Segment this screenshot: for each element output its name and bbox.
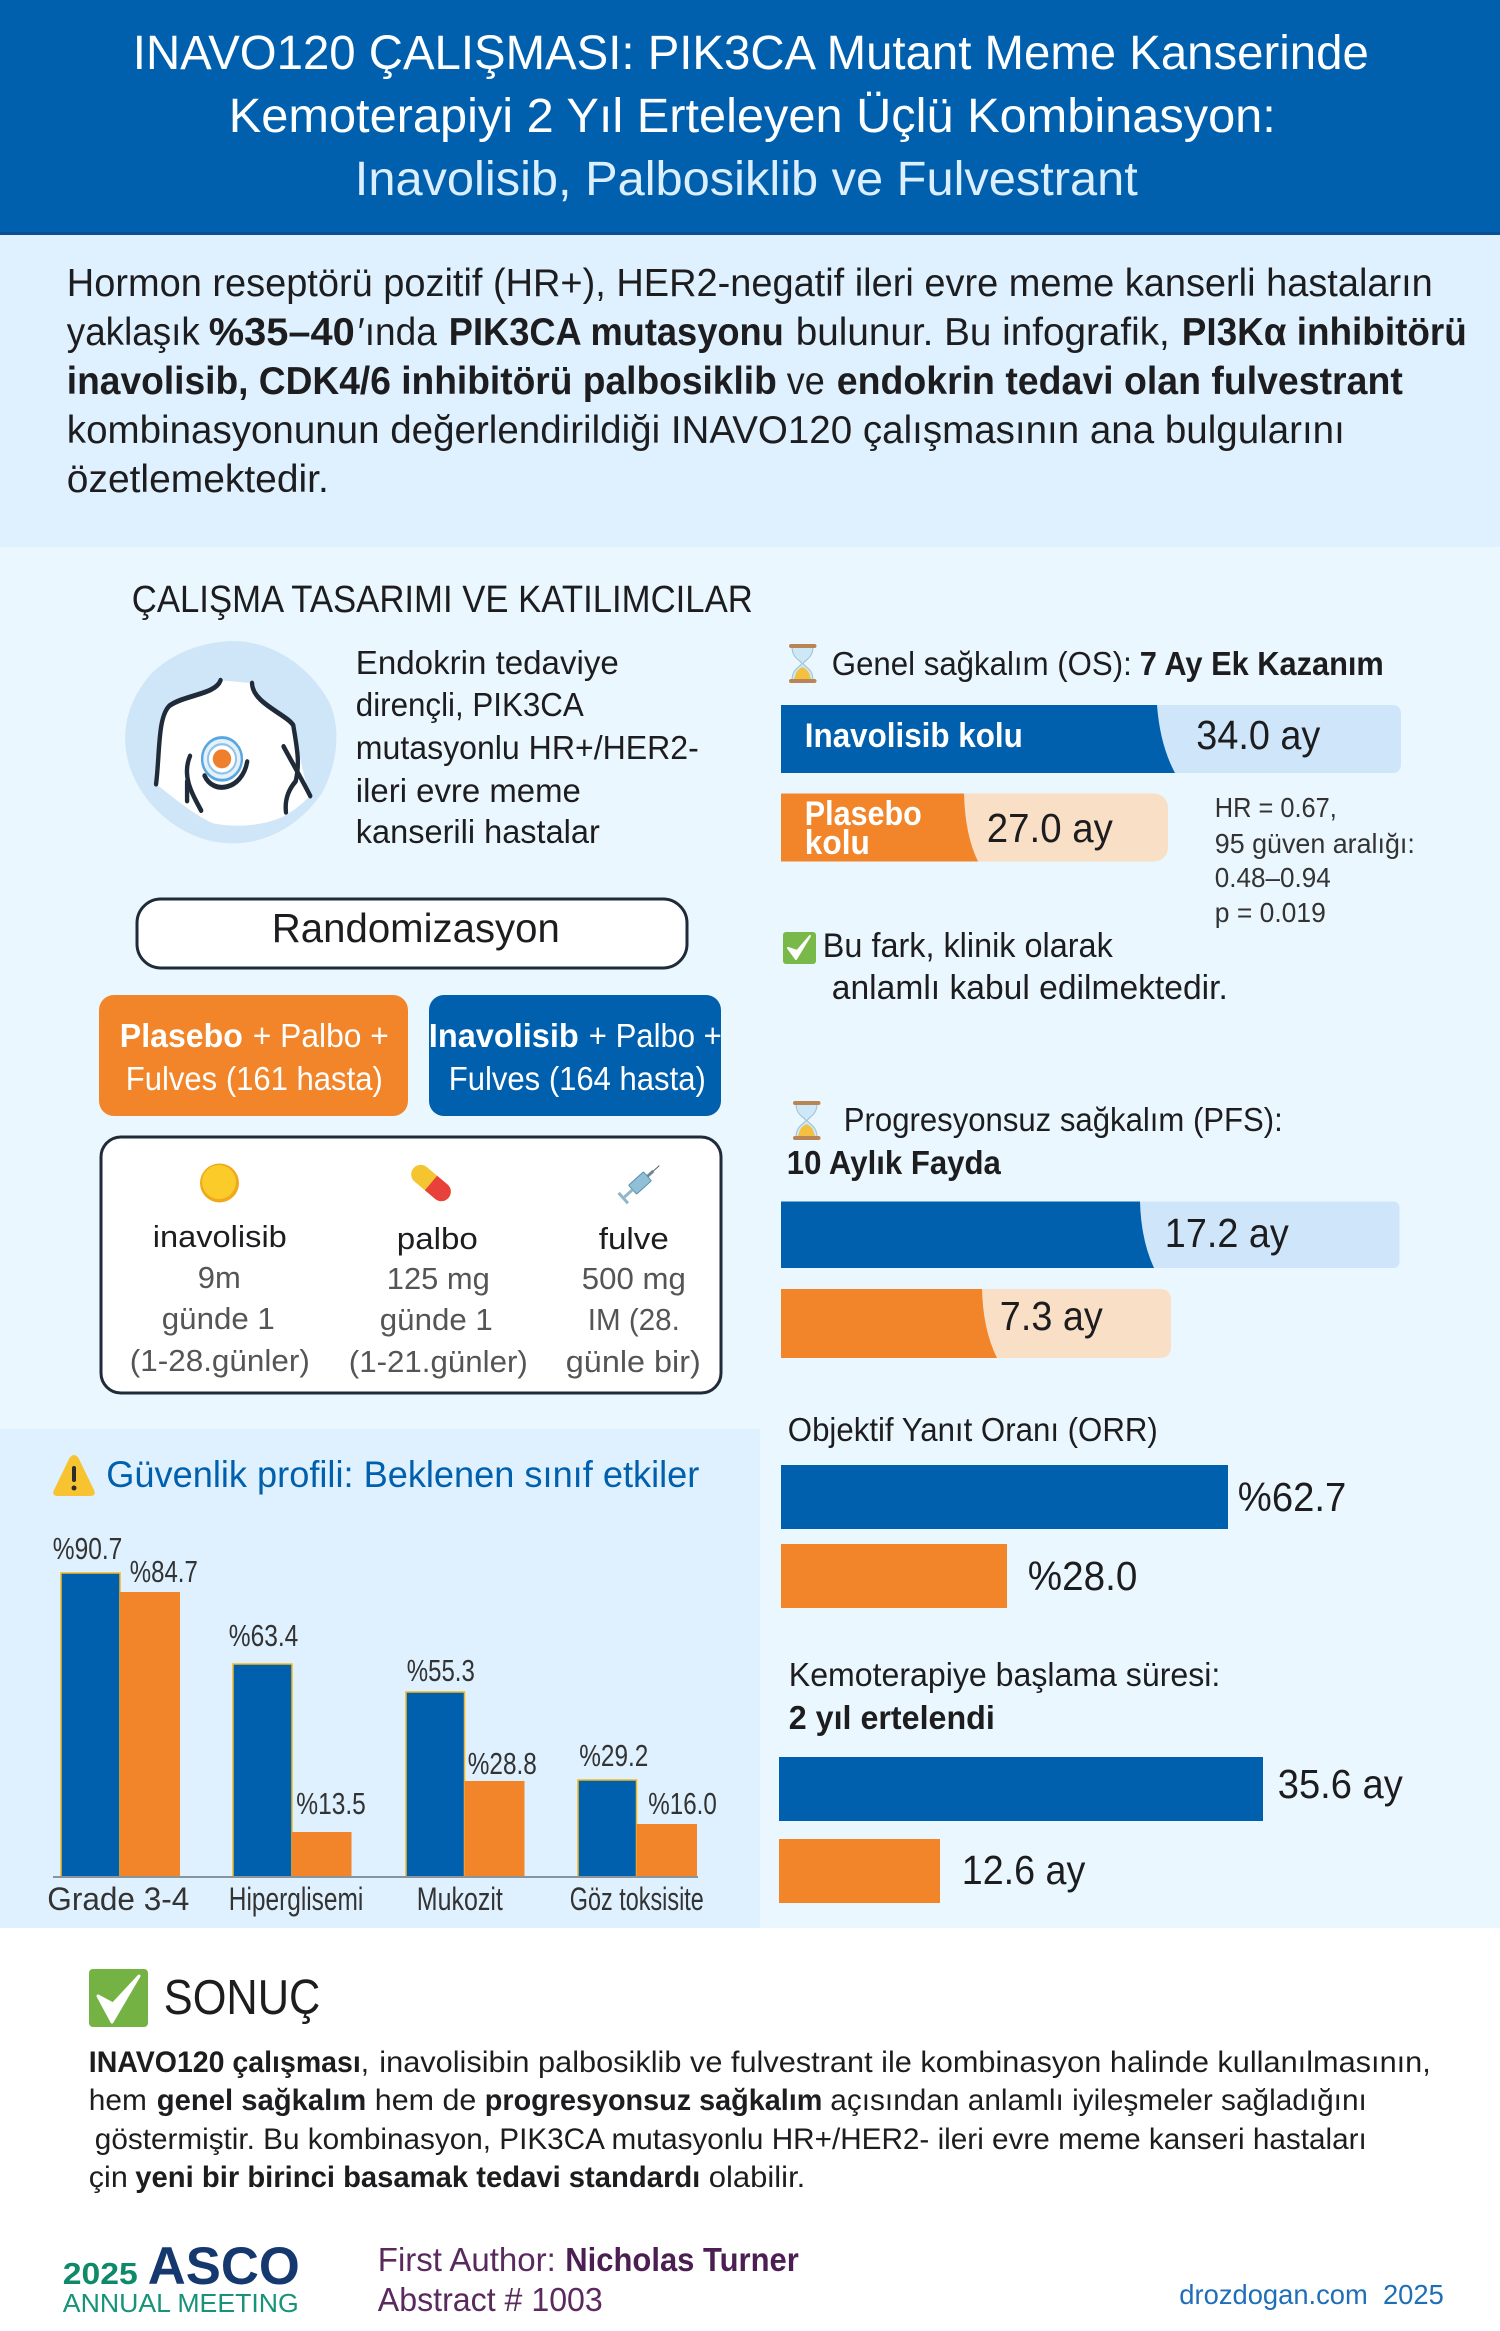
heading: study design: ÇALIŞMA TASARIMI VE KATILIMCILAR [132, 579, 753, 621]
heading: safety profile: Güvenlik profili: Beklenen sınıf etkiler [106, 1454, 699, 1495]
heading: ORR: Objektif Yanıt Oranı (ORR) [788, 1411, 1158, 1448]
bar: inavolisib PFS [781, 1202, 1400, 1268]
panel: study design [99, 579, 753, 1393]
heading: PFS [787, 1101, 1283, 1181]
title: Inavolisib, Palbosiklib ve Fulvestrant [355, 153, 1138, 206]
bar: inavolisib OS: Inavolisib kolu [805, 717, 1023, 755]
panel: introduction: endokrin tedavi olan fulvestrant [837, 360, 1403, 403]
heading: time to chemotherapy: Kemoterapiye başlama süresi: [789, 1656, 1220, 1693]
panel: introduction: Hormon reseptörü pozitif (HR+), HER2-negatif ileri evre meme kanserli hastaların [67, 262, 1433, 305]
bar: placebo ORR [781, 1544, 1137, 1608]
value labels: %29.2 [579, 1738, 648, 1773]
bars: ocular toxicity [578, 1780, 697, 1877]
bar: placebo PFS [781, 1289, 1171, 1358]
bar: placebo chemo [779, 1839, 1086, 1903]
box: inavolisib arm: + Palbo + [589, 1017, 722, 1054]
panel: introduction: %35–40 [209, 311, 355, 354]
text: inavolisib dose: günde 1 [162, 1301, 275, 1336]
value labels: %28.8 [468, 1746, 537, 1781]
icon: check mark [89, 1969, 148, 2027]
box: placebo arm: + Palbo + [253, 1017, 389, 1054]
logo: ASCO 2025 annual meeting [63, 2237, 300, 2318]
callout: clinical significance [823, 927, 1228, 1007]
text: conclusion body: açısından anlamlı iyileşmeler sağladığını [830, 2084, 1367, 2117]
panel: progression-free survival [781, 1101, 1400, 1358]
box: inavolisib arm: Inavolisib [429, 1017, 579, 1054]
panel: introduction: kombinasyonunun değerlendirildiği INAVO120 çalışmasının ana bulgularını [67, 409, 1345, 452]
bar: inavolisib OS [781, 705, 1401, 773]
text: author and abstract: Abstract # 1003 [378, 2281, 603, 2318]
panel: conclusion [89, 1969, 1431, 2194]
header banner [0, 0, 1500, 235]
value labels: %63.4 [229, 1618, 298, 1653]
panel: safety profile [0, 1429, 760, 1928]
heading: PFS: 10 Aylık Fayda [787, 1144, 1001, 1181]
panel: introduction: inavolisib, CDK4/6 inhibitörü palbosiklib [67, 360, 777, 403]
bar: placebo OS: 27.0 ay [987, 805, 1113, 851]
text: conclusion body: genel sağkalım [157, 2084, 366, 2117]
text: fulve dose [566, 1221, 701, 1379]
text: patient population: kanserili hastalar [356, 813, 600, 850]
icon: check mark [783, 932, 816, 964]
text: inavolisib dose: 9m [198, 1260, 241, 1295]
text: patient population: Endokrin tedaviye [356, 644, 619, 681]
callout: clinical significance: anlamlı kabul edilmektedir. [832, 969, 1228, 1007]
panel: dosing [101, 1137, 721, 1393]
text: palbo dose: günde 1 [380, 1302, 493, 1337]
heading: PFS: Progresyonsuz sağkalım (PFS): [844, 1101, 1283, 1138]
box: placebo arm: Plasebo [120, 1017, 243, 1054]
text: patient population [356, 644, 699, 850]
logo: ASCO 2025 annual meeting: 2025 [63, 2256, 138, 2291]
panel: overall survival [781, 644, 1415, 1007]
panel: introduction: yaklaşık [67, 311, 200, 354]
icon: syringe [617, 1160, 664, 1204]
icon: warning triangle [53, 1455, 95, 1496]
value labels: %55.3 [407, 1653, 475, 1688]
panel: introduction: PIK3CA mutasyonu [449, 311, 784, 354]
bar: placebo ORR: %28.0 [1028, 1553, 1137, 1599]
bar: inavolisib chemo [779, 1757, 1403, 1821]
heading: OS: 7 Ay Ek Kazanım [1140, 645, 1384, 682]
text: patient population: dirençli, PIK3CA [356, 686, 584, 723]
text: conclusion body: inavolisibin palbosiklib ve fulvestrant ile kombinasyon halinde kullanılmasının, [379, 2046, 1431, 2079]
text: fulve dose: IM (28. [588, 1302, 680, 1337]
bars: hyperglycemia [233, 1664, 352, 1877]
panel: introduction: PI3Kα inhibitörü [1182, 311, 1467, 354]
heading: time to chemotherapy [789, 1656, 1220, 1736]
category labels: Hiperglisemi [229, 1881, 363, 1917]
icon: hourglass [789, 644, 816, 683]
text: patient population: mutasyonlu HR+/HER2- [356, 729, 699, 766]
text: hazard ratio: 0.48–0.94 [1215, 862, 1331, 893]
heading: OS: Genel sağkalım (OS): [832, 645, 1132, 682]
panel: time to chemotherapy [779, 1656, 1403, 1903]
value labels [53, 1531, 717, 1821]
text: conclusion body: INAVO120 çalışması [89, 2046, 361, 2079]
panel: objective response rate [781, 1411, 1346, 1608]
category labels [47, 1881, 704, 1917]
heading: conclusion: SONUÇ [164, 1971, 320, 2025]
text: website credit: drozdogan.com 2025 [1179, 2279, 1444, 2310]
logo: ASCO 2025 annual meeting: ANNUAL MEETING [63, 2288, 299, 2318]
value labels: %16.0 [648, 1786, 717, 1821]
text: conclusion body [89, 2046, 1431, 2194]
bars: mucositis [406, 1692, 524, 1877]
box: inavolisib arm [429, 995, 722, 1116]
text: hazard ratio: 95 güven aralığı: [1215, 828, 1415, 859]
value labels: %84.7 [130, 1554, 198, 1589]
text: conclusion body: olabilir. [709, 2161, 805, 2194]
box: inavolisib arm: Fulves (164 hasta) [449, 1060, 706, 1097]
text: fulve dose: fulve [599, 1221, 669, 1256]
text: palbo dose: (1-21.günler) [349, 1344, 528, 1379]
box: randomization: Randomizasyon [272, 905, 560, 951]
bar: placebo OS: kolu [805, 824, 870, 862]
text: conclusion body: göstermiştir. Bu kombinasyon, PIK3CA mutasyonlu HR+/HER2- ileri evre meme kanseri hastaları [95, 2123, 1367, 2156]
bar: inavolisib PFS: 17.2 ay [1165, 1210, 1289, 1256]
text: palbo dose: palbo [397, 1221, 478, 1256]
box: placebo arm [99, 995, 408, 1116]
text: conclusion body: yeni bir birinci basamak tedavi standardı [135, 2161, 700, 2194]
text: conclusion body: hem [89, 2084, 147, 2117]
panel: introduction: özetlemektedir. [67, 458, 329, 501]
text: hazard ratio: HR = 0.67, [1215, 792, 1337, 823]
text: inavolisib dose [130, 1219, 310, 1378]
box: randomization [137, 899, 687, 968]
heading: OS [832, 645, 1384, 682]
icon: capsule [407, 1161, 455, 1205]
icon: hourglass [793, 1101, 820, 1140]
value labels: %13.5 [296, 1786, 366, 1821]
text: author and abstract: First Author: [378, 2241, 556, 2278]
text: conclusion body: , [361, 2046, 369, 2079]
bar chart: adverse events [47, 1531, 717, 1917]
text: hazard ratio [1215, 792, 1415, 928]
bars: grade 3-4 [61, 1573, 180, 1877]
text: conclusion body: hem de [375, 2084, 476, 2117]
bar: placebo chemo: 12.6 ay [962, 1847, 1086, 1893]
text: fulve dose: 500 mg [582, 1261, 686, 1296]
text: palbo dose: 125 mg [387, 1261, 490, 1296]
text: author and abstract [378, 2241, 799, 2318]
category labels: Grade 3-4 [47, 1881, 189, 1917]
logo: ASCO 2025 annual meeting: ASCO [148, 2237, 300, 2296]
category labels: Mukozit [417, 1881, 503, 1917]
bar: inavolisib chemo: 35.6 ay [1278, 1761, 1403, 1807]
value labels: %90.7 [53, 1531, 122, 1566]
text: conclusion body: progresyonsuz sağkalım [485, 2084, 822, 2117]
panel: introduction: ve [787, 360, 825, 403]
bar: inavolisib ORR: %62.7 [1238, 1474, 1346, 1520]
title: INAVO120 ÇALIŞMASI: PIK3CA Mutant Meme Kanserinde [133, 27, 1369, 80]
text: conclusion body: çin [89, 2161, 128, 2194]
panel: introduction: bulunur. Bu infografik, [796, 311, 1170, 354]
title: Kemoterapiyi 2 Yıl Erteleyen Üçlü Kombinasyon: [229, 90, 1276, 143]
heading: time to chemotherapy: 2 yıl ertelendi [789, 1699, 995, 1736]
text: palbo dose [349, 1221, 528, 1379]
text: hazard ratio: p = 0.019 [1215, 897, 1326, 928]
text: fulve dose: günle bir) [566, 1344, 701, 1379]
callout: clinical significance: Bu fark, klinik olarak [823, 927, 1114, 965]
bar: placebo PFS: 7.3 ay [1000, 1293, 1103, 1339]
text: patient population: ileri evre meme [356, 772, 581, 809]
panel: introduction: ′ında [358, 311, 437, 354]
category labels: Göz toksisite [570, 1881, 704, 1917]
icon: yellow pill [200, 1164, 239, 1202]
text: inavolisib dose: (1-28.günler) [130, 1343, 310, 1378]
text: inavolisib dose: inavolisib [153, 1219, 287, 1254]
bar: inavolisib OS: 34.0 ay [1196, 712, 1321, 758]
bar: inavolisib ORR [781, 1465, 1346, 1529]
panel: introduction [0, 235, 1500, 547]
box: placebo arm: Fulves (161 hasta) [126, 1060, 383, 1097]
bar: placebo OS [781, 794, 1168, 862]
icon: breast illustration [125, 641, 336, 843]
title [133, 27, 1369, 206]
bar: placebo OS: Plasebo [805, 795, 922, 833]
text: author and abstract: Nicholas Turner [565, 2241, 799, 2278]
